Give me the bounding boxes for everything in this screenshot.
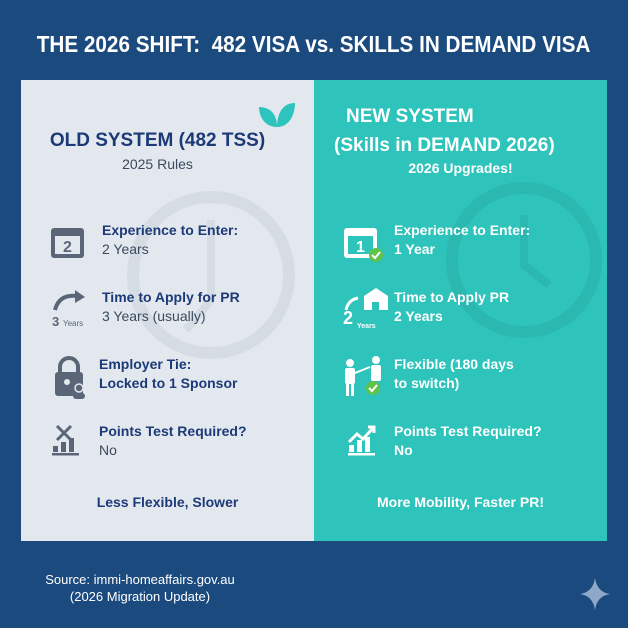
item: time to PR: Time to Apply PR <box>394 289 509 305</box>
icon: arrow 3 years: Years <box>63 319 83 328</box>
title: THE 2026 SHIFT: 482 VISA vs. SKILLS IN DEMAND VISA <box>37 31 591 57</box>
icon: arrow 3 years <box>52 290 85 329</box>
icon: watermark clock <box>446 182 602 338</box>
item: flexible <box>345 356 514 396</box>
item: experience: 2 Years <box>102 241 149 257</box>
heading: new system: NEW SYSTEM <box>346 106 474 127</box>
icon: house 2 years <box>343 288 388 330</box>
heading: old system: OLD SYSTEM (482 TSS) <box>50 130 265 151</box>
icon: leaves <box>259 103 295 127</box>
icon: calendar 1 with check: 1 <box>356 239 365 256</box>
icon: rising chart <box>348 426 376 456</box>
icon: calendar 2 <box>51 228 84 258</box>
item: points test <box>348 423 542 458</box>
item: time to PR: 2 Years <box>394 308 443 324</box>
item: experience: Experience to Enter: <box>394 222 530 238</box>
footer text: old: Less Flexible, Slower <box>97 494 238 510</box>
panel: new system <box>314 80 607 541</box>
item: points test: No <box>99 442 117 458</box>
item: experience: Experience to Enter: <box>102 222 238 238</box>
item: points test: Points Test Required? <box>99 423 247 439</box>
footer text: new: More Mobility, Faster PR! <box>377 494 544 510</box>
source text: Source: immi-homeaffairs.gov.au <box>45 572 235 587</box>
icon: lock <box>55 356 85 399</box>
item: time to PR <box>52 289 240 329</box>
heading: new system: (Skills in DEMAND 2026) <box>334 135 555 156</box>
item: time to PR <box>343 288 509 330</box>
item: employer tie: Locked to 1 Sponsor <box>99 375 237 391</box>
icon: sparkle <box>580 578 610 610</box>
subheading: 2026 Upgrades! <box>408 160 513 176</box>
item: time to PR: 3 Years (usually) <box>102 308 206 324</box>
item: employer tie: Employer Tie: <box>99 356 191 372</box>
icon: chart with x <box>52 425 79 456</box>
icon: arrow 3 years: 3 <box>52 314 59 329</box>
source text: (2026 Migration Update) <box>70 589 210 604</box>
heading: new system <box>334 106 555 156</box>
item: experience <box>344 222 530 262</box>
icon: house 2 years: 2 <box>343 308 353 328</box>
icon: people switching <box>345 356 381 396</box>
source text <box>45 572 235 604</box>
panel: old system <box>21 80 314 541</box>
icon: calendar 1 with check <box>344 228 383 262</box>
icon: calendar 2: 2 <box>63 239 72 256</box>
item: points test <box>52 423 247 458</box>
item: points test: Points Test Required? <box>394 423 542 439</box>
item: flexible: Flexible (180 days <box>394 356 514 372</box>
item: points test: No <box>394 442 413 458</box>
item: time to PR: Time to Apply for PR <box>102 289 240 305</box>
item: flexible: to switch) <box>394 375 459 391</box>
item: experience <box>51 222 238 258</box>
icon: watermark clock <box>127 191 295 359</box>
subheading: 2025 Rules <box>122 156 193 172</box>
icon: house 2 years: Years <box>357 323 376 330</box>
item: employer tie <box>55 356 238 399</box>
item: experience: 1 Year <box>394 241 435 257</box>
